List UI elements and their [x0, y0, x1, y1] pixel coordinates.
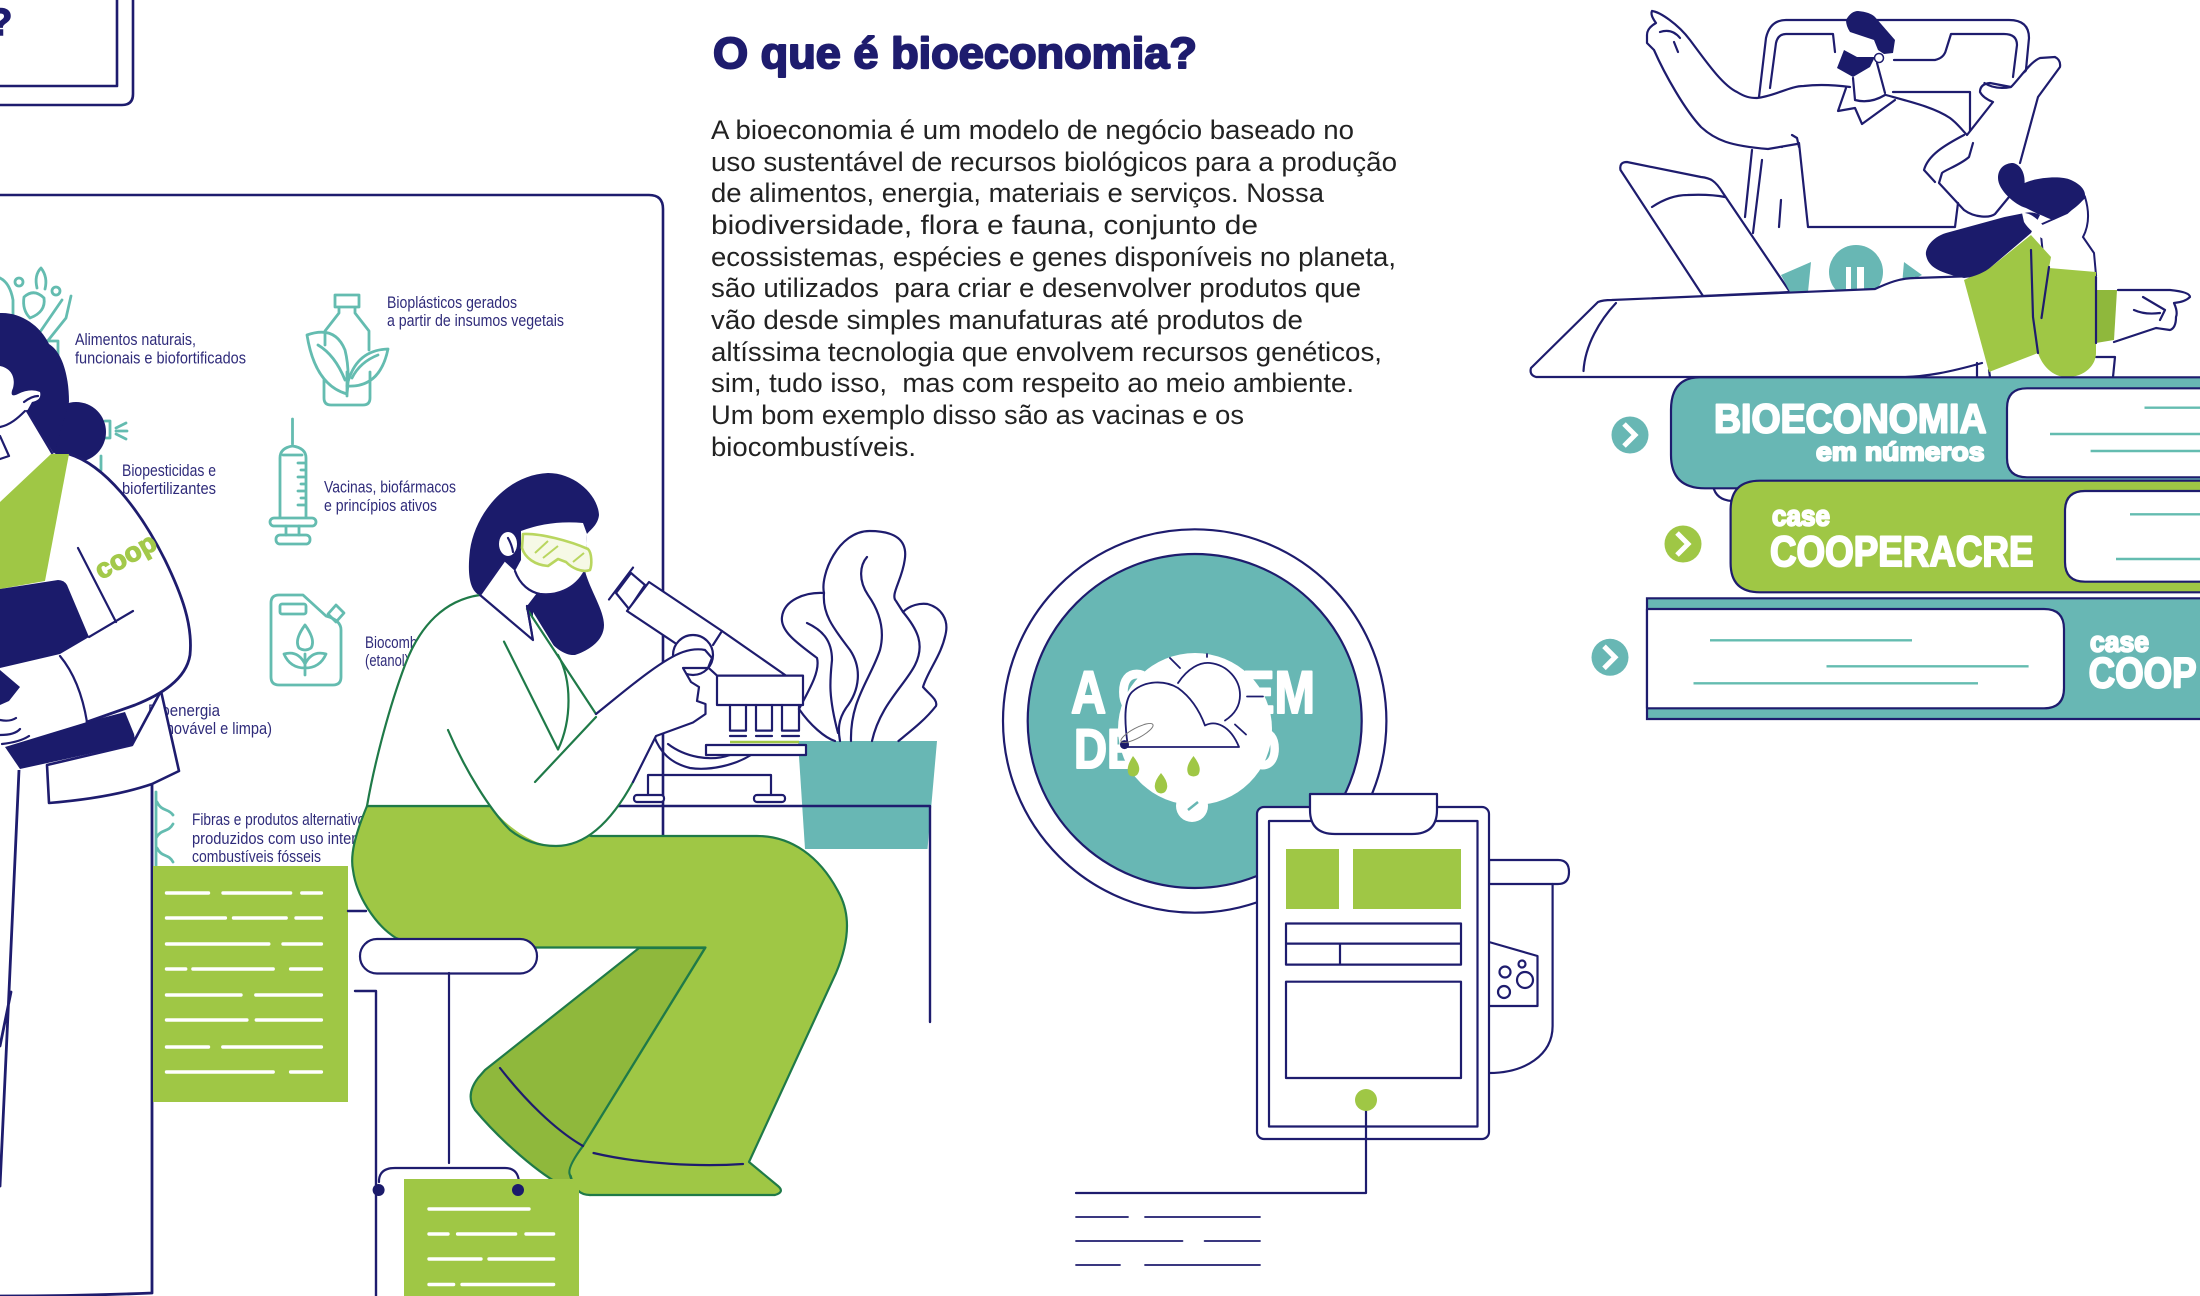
small arc behind books: [1713, 486, 1732, 501]
icon: fuel canister: [271, 595, 344, 685]
body text block: [711, 115, 1397, 462]
book label: COOPERACRE: [1770, 528, 2034, 576]
label: bioplastics: Bioplásticos gerados: [387, 294, 517, 312]
book label: case: [1772, 501, 1830, 533]
woman: [1926, 163, 2190, 377]
label: vaccines: Vacinas, biofármacos: [324, 478, 456, 496]
icon: bottle with leaves: [307, 295, 388, 405]
note: green text card: [153, 866, 348, 1102]
book: bioeconomia em números: [1671, 377, 2200, 488]
illustration: scientist at microscope: [352, 473, 847, 1195]
label: food: [75, 331, 246, 368]
top-left box fragment: [0, 0, 133, 105]
player controls: [1781, 245, 1922, 299]
man neck and collar: [1853, 60, 1885, 101]
label: biofuels: Biocombustíveis: [365, 634, 463, 652]
lab bench and microscope: [348, 531, 946, 1296]
label: food: funcionais e biofortificados: [75, 350, 246, 368]
book label: [1714, 396, 1986, 467]
hair: [469, 473, 604, 655]
panel: bioeconomy products: [0, 195, 663, 866]
book label: em números: [1816, 437, 1984, 467]
icon: biopesticide: [101, 421, 127, 470]
icon: food: [0, 268, 71, 356]
pants: [471, 948, 705, 1195]
torso: [367, 595, 712, 846]
label: bioenergy: Bioenergia: [148, 702, 221, 720]
button: arrow green: [1664, 526, 1702, 562]
book: case coop: [1647, 598, 2200, 719]
label: biopesticides: biofertilizantes: [122, 480, 216, 498]
icon: cloud, sun and rain: [1118, 653, 1272, 822]
label: biofuels: [365, 634, 463, 670]
circular badge: a origem de tudo: [1003, 529, 1386, 913]
label: fibres: Fibras e produtos alternativos: [192, 811, 372, 829]
face: [480, 522, 587, 640]
body text block: uso sustentável de recursos biológicos para a produção: [711, 147, 1397, 177]
clipboard: [1076, 794, 1489, 1193]
body text block: A bioeconomia é um modelo de negócio baseado no: [711, 115, 1354, 145]
book label: [1770, 501, 2034, 576]
badge heading: A ORIGEM: [1071, 659, 1315, 726]
microscope: [596, 568, 806, 802]
beaker: [1489, 860, 1569, 1073]
body text block: vão desde simples manufaturas até produtos de: [711, 305, 1303, 335]
book label: BIOECONOMIA: [1714, 396, 1986, 442]
body text block: Um bom exemplo disso são as vacinas e os: [711, 400, 1244, 430]
badge heading: [1071, 659, 1315, 780]
label: fibres: produzidos com uso intensivo de: [192, 830, 406, 848]
body text block: biocombustíveis.: [711, 432, 916, 462]
label: bioenergy: [148, 702, 272, 738]
chair: [1620, 162, 1790, 296]
body text block: biodiversidade, flora e fauna, conjunto de: [711, 210, 1258, 240]
label: food: Alimentos naturais,: [75, 331, 196, 349]
label: vaccines: [324, 478, 456, 515]
label: fibres: [192, 811, 406, 866]
button: arrow teal 1: [1612, 416, 1648, 454]
plant: [782, 531, 946, 741]
coop logo: coop: [89, 527, 162, 585]
title: O que é bioeconomia?: [713, 29, 1197, 78]
body text block: sim, tudo isso, mas com respeito ao meio ambiente.: [711, 368, 1354, 398]
label: vaccines: e princípios ativos: [324, 497, 437, 515]
label: biopesticides: [122, 462, 216, 498]
icon: syringe: [270, 419, 316, 544]
book label: [2089, 627, 2197, 698]
label: fibres: combustíveis fósseis: [192, 848, 321, 866]
label: bioplastics: a partir de insumos vegetais: [387, 312, 564, 330]
button: arrow teal 2: [1592, 639, 1628, 676]
video frame: [1745, 20, 2029, 233]
body text block: altíssima tecnologia que envolvem recursos genéticos,: [711, 337, 1382, 367]
label: biopesticides: Biopesticidas e: [122, 462, 216, 480]
badge heading: DE TUDO: [1074, 717, 1280, 780]
goggles: [522, 534, 591, 571]
pot: [798, 741, 937, 849]
bottom green note: [373, 1179, 579, 1296]
body text block: ecossistemas, espécies e genes disponíveis no planeta,: [711, 242, 1396, 272]
book label: case: [2090, 627, 2149, 659]
man: [1647, 11, 2060, 227]
illustration: two people on laptop and books: [1531, 11, 2190, 377]
label: bioenergy: (renovável e limpa): [148, 720, 272, 738]
body text block: de alimentos, energia, materiais e serviços. Nossa: [711, 178, 1324, 208]
stool: [360, 939, 537, 1182]
book: case cooperacre: [1731, 481, 2200, 592]
label: bioplastics: [387, 294, 564, 330]
icon: fibres: [156, 792, 173, 866]
illustration: person in lab coat holding tablet: [0, 313, 190, 1296]
body text block: são utilizados para criar e desenvolver produtos que: [711, 273, 1361, 303]
label: biofuels: (etanol): [365, 652, 409, 670]
laptop base: [1531, 276, 1982, 377]
note lines under clipboard: [1076, 1217, 1260, 1265]
man head: [1844, 32, 1874, 57]
